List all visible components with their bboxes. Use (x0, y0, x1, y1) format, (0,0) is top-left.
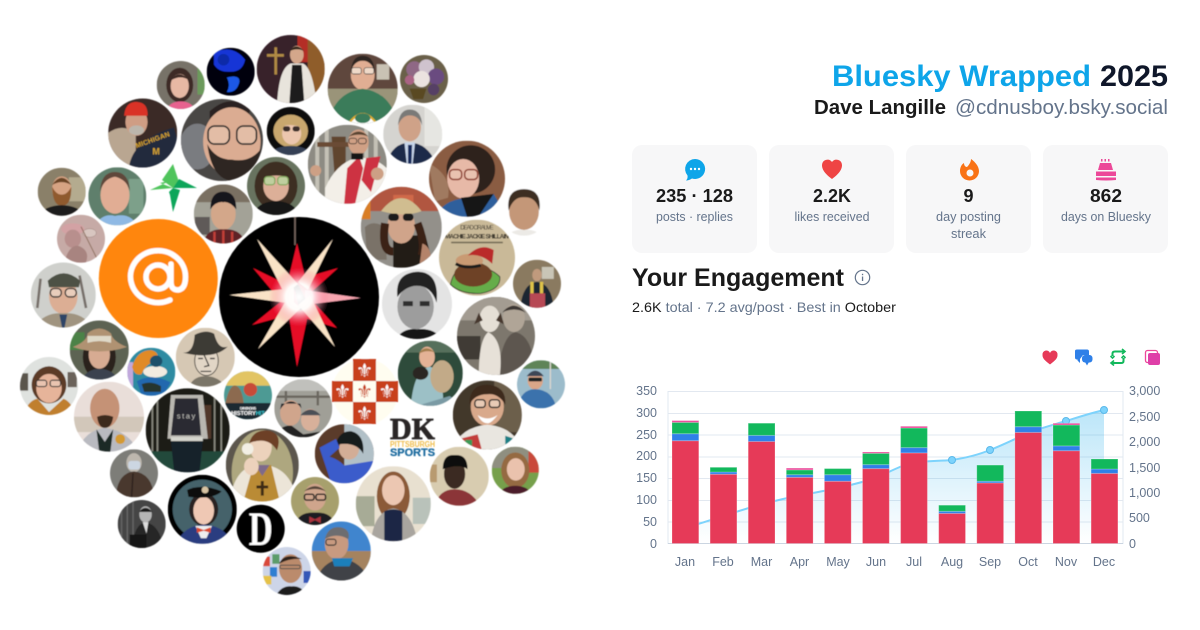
cumulative engagement area and line (685, 406, 1108, 544)
stat card: streak (906, 145, 1031, 253)
avatar: dead or alive cartoon poster: MACHIE JACKIE SHILLAIN (445, 234, 509, 241)
avatar: woman in wide brimmed hat (70, 320, 129, 380)
avatar: fleur-de-lis cross flag: ⚜ (356, 361, 373, 382)
month labels: Sep (979, 555, 1001, 569)
avatar: woman priest with red glasses (429, 141, 505, 217)
stat card: likes: likes received (794, 210, 870, 224)
stat card: streak: day posting (936, 210, 1001, 224)
logo: DK Pittsburgh Sports: SPORTS (390, 447, 435, 459)
bar: Feb (710, 467, 737, 544)
month labels: Dec (1093, 555, 1115, 569)
right axis labels: 1,000 (1129, 486, 1160, 500)
avatar: woman with green glasses (246, 156, 306, 216)
bar: Jul (901, 426, 927, 544)
avatar: bald man with light blue shirt (88, 167, 146, 225)
icon: reposts legend (1110, 349, 1126, 366)
icon: info (855, 270, 870, 285)
month labels: Apr (790, 555, 809, 569)
icon: likes legend (1042, 350, 1058, 364)
left axis labels: 300 (636, 406, 657, 420)
left axis labels: 150 (636, 471, 657, 485)
left axis labels: 0 (650, 537, 657, 551)
month labels: Oct (1018, 555, 1038, 569)
avatar: man with dog in hedge (398, 341, 463, 406)
avatar: man with stained glass (263, 547, 311, 595)
avatar: bald man with goatee and grey suit (74, 382, 144, 452)
legend icons (1042, 349, 1160, 366)
avatar: fleur-de-lis cross flag: ⚜ (356, 404, 373, 425)
avatar: woman in pink (156, 60, 206, 110)
avatar: man with michigan hoodie: M (152, 146, 160, 156)
avatar: man under blue sky (312, 522, 371, 580)
avatar: older man with flat cap (31, 262, 96, 328)
avatar: bearded man with glasses and cat (179, 99, 263, 181)
avatar: preacher with red stole (308, 125, 387, 204)
icon: heart (822, 160, 842, 179)
user name and handle: Dave Langille (814, 97, 946, 119)
icon: chat bubble (685, 159, 705, 180)
icon: quotes legend (1146, 350, 1160, 365)
avatar: cartoon goofy character (127, 348, 175, 396)
month labels: Jun (866, 555, 886, 569)
month labels: Aug (941, 555, 963, 569)
avatar: black and white portrait (382, 269, 452, 339)
month labels: Feb (712, 555, 734, 569)
heading: your engagement: Your Engagement (632, 264, 845, 292)
bar: Nov (1053, 423, 1080, 544)
avatar: dan snow history hit: HISTORYHIT (231, 411, 265, 417)
title: 2025 (1100, 60, 1168, 93)
avatar: man at lake with sunglasses (517, 360, 565, 408)
avatar: woman in grey cardigan (356, 466, 431, 541)
stat card: posts and replies (632, 145, 757, 253)
avatar: smiling priest with embroidered stole (453, 380, 522, 450)
month labels: Mar (751, 555, 772, 569)
avatar: illustrated priest holding host (226, 428, 299, 515)
title: Bluesky Wrapped (832, 60, 1091, 93)
avatar: tricorn hat sketch (176, 328, 235, 387)
right axis labels: 0 (1129, 537, 1136, 551)
month labels: May (826, 555, 851, 569)
left axis labels: 250 (636, 428, 657, 442)
right axis labels: 2,000 (1129, 435, 1160, 449)
avatar: priest in white with black stole (257, 35, 325, 103)
avatar: masked portrait painting (110, 449, 158, 497)
avatar: dan snow history hit (224, 371, 272, 419)
avatar: man with michigan hoodie: MICHIGAN (135, 131, 171, 150)
engagement summary: 2.6K total · 7.2 avg/post · Best in October (632, 299, 896, 315)
icon: green four-point star logo (150, 164, 197, 212)
avatar: woman with short brown hair (20, 357, 78, 415)
avatar: illuminated moravian star (219, 217, 379, 377)
user name and handle: @cdnusboy.bsky.social (955, 97, 1168, 119)
bubble cluster of followers (20, 35, 565, 595)
avatar: flowers painting (400, 55, 448, 103)
avatar: dark-haired man with plaid shirt (194, 184, 253, 244)
left axis labels: 350 (636, 384, 657, 398)
avatar: man in green packers hoodie (328, 54, 398, 124)
avatar: man in navy suit (383, 105, 442, 164)
stat card: likes (769, 145, 894, 253)
right axis labels: 1,500 (1129, 461, 1160, 475)
month labels (675, 555, 1115, 569)
left axis labels: 100 (636, 493, 657, 507)
bar: Dec (1091, 459, 1118, 544)
bar: Oct (1015, 411, 1042, 544)
grid lines and axes (668, 391, 1123, 544)
stat card: days on Bluesky: days on Bluesky (1061, 210, 1152, 224)
avatar: mary poppins (168, 475, 237, 544)
month labels: Jan (675, 555, 695, 569)
bar: May (824, 469, 851, 544)
right axis labels (1129, 384, 1160, 551)
left axis labels: 50 (643, 515, 657, 529)
avatar: blue jacket person with hat (315, 424, 374, 483)
bar: Aug (939, 505, 966, 544)
avatar: man with dog sepia (457, 297, 535, 375)
user name and handle (814, 97, 1168, 119)
avatar: couple in snow (274, 379, 332, 437)
stat card: posts and replies: 235 · 128 (656, 186, 733, 206)
right axis labels: 2,500 (1129, 410, 1160, 424)
avatar: fleur-de-lis cross flag: ⚜ (356, 382, 373, 403)
logo: DK Pittsburgh Sports: PITTSBURGH (390, 440, 435, 449)
left axis labels (636, 384, 657, 551)
avatar: man with bow tie (291, 477, 339, 525)
month labels: Nov (1055, 555, 1078, 569)
avatar: fleur-de-lis cross flag: ⚜ (378, 382, 396, 403)
avatar: pulpit priest with yellow stole (513, 260, 561, 309)
bar: Jan (672, 421, 699, 544)
avatar: man in maroon hoodie (430, 447, 489, 506)
avatar: young woman with red-brown hair (492, 447, 539, 502)
icon: cake (1096, 159, 1116, 180)
avatar: blue glow (207, 48, 255, 96)
avatar: nixon black and white (118, 500, 166, 548)
bar: Jun (862, 452, 889, 544)
left axis labels: 200 (636, 449, 657, 463)
right axis labels: 3,000 (1129, 384, 1160, 398)
combined bar and line chart (636, 384, 1160, 569)
avatar: mirror selfie with black shirt (146, 388, 230, 472)
stacked bars by month (672, 411, 1118, 544)
stat card: days on Bluesky (1043, 145, 1168, 253)
avatar: black D newspaper logo: D (249, 503, 273, 556)
stat card: posts and replies: posts · replies (656, 210, 733, 224)
right axis labels: 500 (1129, 511, 1150, 525)
bar: Apr (786, 468, 813, 544)
stat card: streak: 9 (963, 186, 974, 206)
avatar: fleur-de-lis cross flag: ⚜ (334, 382, 351, 403)
bar: Mar (748, 423, 775, 544)
avatar: blonde woman with glasses (267, 107, 315, 162)
avatar: fleur-de-lis cross flag (332, 359, 398, 425)
icon: replies legend (1075, 350, 1092, 366)
avatar: pink sketch drawing (57, 215, 105, 263)
stat card: days on Bluesky: 862 (1090, 186, 1122, 206)
avatar: man head cutout (508, 188, 540, 236)
avatar: dan snow history hit: DAN SNOW'S (240, 407, 257, 411)
avatar: dead or alive cartoon poster: DEAD OR ALIVE (460, 225, 494, 232)
avatar: dead or alive cartoon poster (439, 220, 515, 296)
icon: flame (960, 159, 979, 180)
stat card: likes: 2.2K (813, 186, 851, 206)
avatar: mirror selfie with black shirt: stay (177, 412, 195, 421)
avatar: man with michigan hoodie (108, 98, 178, 168)
avatar: bearded man in black clerical (37, 167, 86, 217)
stat card: streak: streak (951, 227, 987, 241)
avatar: orange at-sign logo (99, 219, 218, 338)
month labels: Jul (906, 555, 922, 569)
avatar: woman with straw hat (361, 187, 442, 268)
bar: Sep (977, 465, 1004, 544)
logo: DK Pittsburgh Sports: DK (390, 411, 435, 446)
